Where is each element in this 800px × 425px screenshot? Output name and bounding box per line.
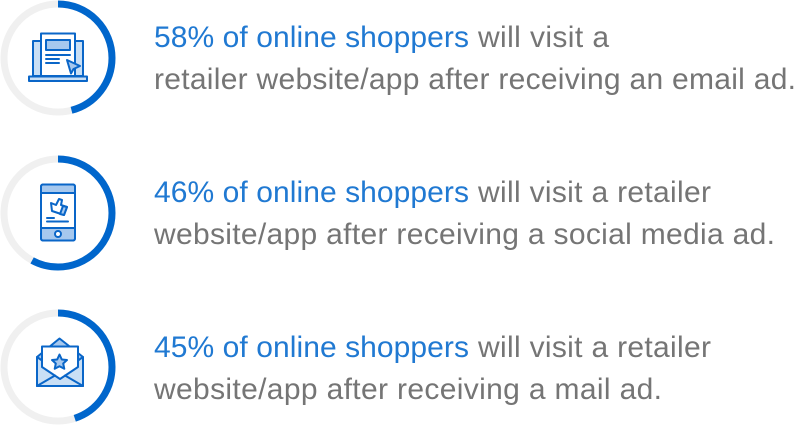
text: social media statistic: will visit a retailer [477,176,711,209]
row: email ad [4,4,796,112]
text: mail statistic: website/app after receiving a mail ad. [153,373,662,406]
text: email statistic: 58% of online shoppers [154,21,469,54]
text: mail statistic: will visit a retailer [477,331,711,364]
text: social media statistic: 46% of online shoppers [154,176,469,209]
row: social media ad [4,159,775,267]
text: social media statistic [153,176,775,251]
text: email statistic [154,21,796,96]
icon: laptop with newsletter [29,34,87,81]
text: social media statistic: website/app after receiving a social media ad. [153,218,775,251]
progress ring: social media [4,159,112,267]
text: email statistic: will visit a [477,21,609,54]
icon: open envelope with star [37,338,83,386]
text: mail statistic: 45% of online shoppers [154,331,469,364]
progress ring: mail [4,313,112,421]
text: email statistic: retailer website/app after receiving an email ad. [154,63,796,96]
row: mail ad [4,313,711,421]
icon: phone with thumbs up [41,184,75,240]
text: mail statistic [153,331,711,406]
progress ring: email [4,4,112,112]
